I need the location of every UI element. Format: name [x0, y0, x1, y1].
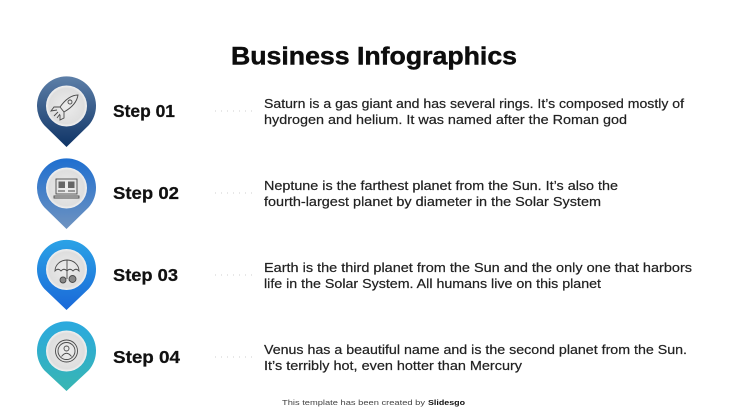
description: hydrogen and helium. It was named after the Roman god — [264, 113, 627, 127]
step label: Step 03 — [113, 265, 178, 285]
footer credit: Slidesgo — [428, 398, 465, 407]
panel: step 01 — [37, 76, 685, 147]
panel: step 04 — [37, 321, 687, 391]
description — [264, 343, 687, 373]
icon: badge pin — [37, 321, 96, 391]
description: Earth is the third planet from the Sun and the only one that harbors — [264, 261, 692, 275]
dotted connector — [215, 110, 256, 112]
panel: step 02 — [37, 158, 618, 229]
description — [264, 179, 618, 209]
dotted connector — [215, 274, 256, 276]
description: Neptune is the farthest planet from the Sun. It’s also the — [264, 179, 618, 193]
footer credit: This template has been created by — [282, 398, 425, 407]
description: Saturn is a gas giant and has several rings. It’s composed mostly of — [264, 97, 685, 111]
title: Business Infographics — [231, 42, 517, 70]
description: Venus has a beautiful name and is the second planet from the Sun. — [264, 343, 687, 357]
icon: rocket pin — [37, 76, 96, 147]
description — [264, 261, 692, 291]
panel: step 03 — [37, 240, 692, 310]
description: life in the Solar System. All humans live on this planet — [264, 277, 602, 291]
description — [264, 97, 685, 127]
description: It’s terribly hot, even hotter than Mercury — [264, 359, 523, 373]
step label: Step 02 — [113, 183, 179, 203]
dotted connector — [215, 192, 256, 194]
dotted connector — [215, 356, 256, 358]
step label: Step 04 — [113, 347, 180, 367]
icon: umbrella pin — [37, 240, 96, 310]
footer credit — [282, 398, 465, 407]
step label: Step 01 — [113, 101, 175, 121]
description: fourth-largest planet by diameter in the Solar System — [264, 195, 601, 209]
icon: laptop pin — [37, 158, 96, 229]
